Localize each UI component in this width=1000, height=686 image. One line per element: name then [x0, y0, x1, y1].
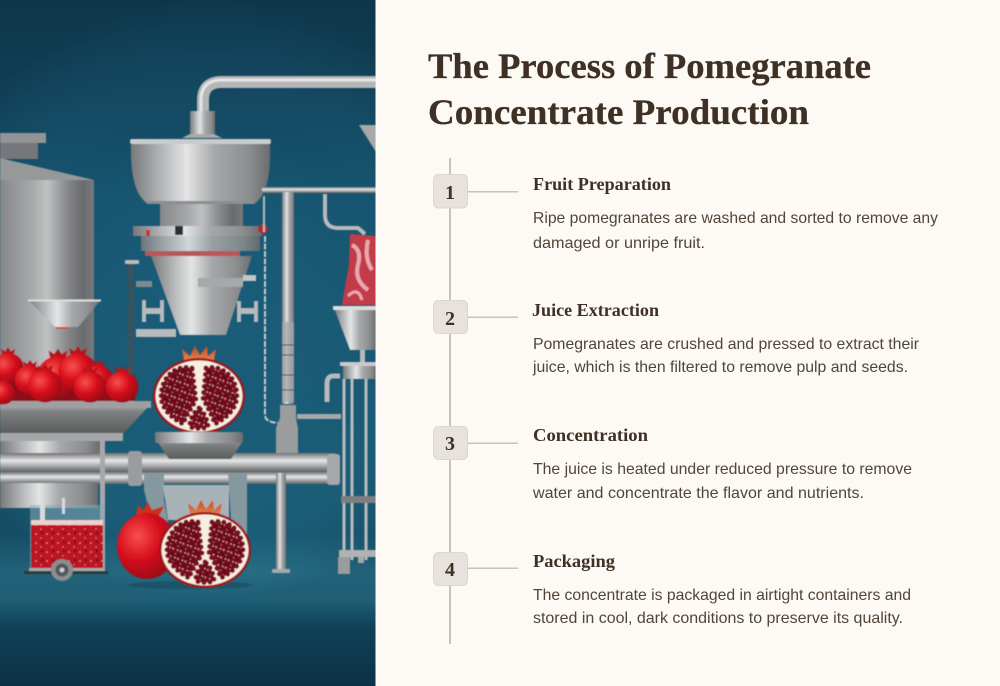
step 3: concentration — [434, 425, 912, 502]
step 4: packaging — [434, 551, 911, 627]
title — [428, 46, 871, 132]
fruit tray — [0, 401, 151, 441]
cut pomegranate on press — [153, 346, 245, 434]
collection bowl — [333, 306, 376, 362]
title: Concentrate Production — [428, 92, 809, 132]
main horizontal pipe — [0, 451, 340, 486]
floor shadows — [128, 581, 252, 589]
whole pomegranate — [117, 502, 177, 579]
description 3 — [532, 461, 912, 502]
heading 2: Juice Extraction — [532, 300, 659, 320]
description 1 — [533, 210, 938, 252]
step 1: fruit preparation — [434, 174, 938, 252]
badge 3: 3 — [445, 433, 455, 455]
badge 4 — [434, 552, 468, 586]
description 3: water and concentrate the flavor and nutrients. — [532, 485, 864, 502]
support stand — [144, 473, 247, 535]
instrument chains — [125, 196, 278, 423]
badge 2: 2 — [445, 308, 455, 330]
juice tank — [24, 498, 108, 581]
description 2: juice, which is then filtered to remove pulp and seeds. — [532, 359, 908, 376]
badge 1 — [434, 174, 468, 208]
overhead pipe — [203, 82, 376, 112]
description 2: Pomegranates are crushed and pressed to extract their — [533, 336, 920, 353]
heading 4: Packaging — [533, 551, 615, 571]
description 1: damaged or unripe fruit. — [533, 235, 705, 252]
timeline spine — [449, 158, 451, 644]
panel: production line illustration — [0, 0, 376, 686]
evaporator hopper — [130, 111, 271, 335]
badge 4: 4 — [445, 559, 455, 581]
pile of pomegranates — [0, 346, 138, 405]
title: The Process of Pomegranate — [428, 46, 871, 86]
support leg — [272, 473, 290, 573]
badge 3 — [434, 426, 468, 460]
cut pomegranate on floor — [159, 500, 251, 588]
right-hand funnel — [359, 125, 376, 152]
description 4 — [533, 587, 911, 627]
description 1: Ripe pomegranates are washed and sorted to remove any — [533, 210, 938, 227]
badge 2 — [434, 300, 468, 334]
heading 1: Fruit Preparation — [533, 174, 671, 194]
service pipes — [262, 187, 376, 453]
bottom tray stack — [0, 441, 105, 571]
filter column — [338, 362, 376, 574]
press bowl — [155, 432, 243, 459]
description 4: stored in cool, dark conditions to preserve its quality. — [533, 610, 903, 627]
heading 3: Concentration — [533, 425, 648, 445]
illustration backdrop — [0, 0, 376, 686]
badge 1: 1 — [445, 182, 455, 204]
storage tank — [0, 133, 101, 420]
flanges — [142, 300, 258, 322]
seed bag — [342, 234, 376, 305]
description 4: The concentrate is packaged in airtight containers and — [533, 587, 911, 604]
step 2: juice extraction — [434, 300, 920, 376]
description 3: The juice is heated under reduced pressure to remove — [533, 461, 912, 478]
description 2 — [532, 336, 920, 376]
